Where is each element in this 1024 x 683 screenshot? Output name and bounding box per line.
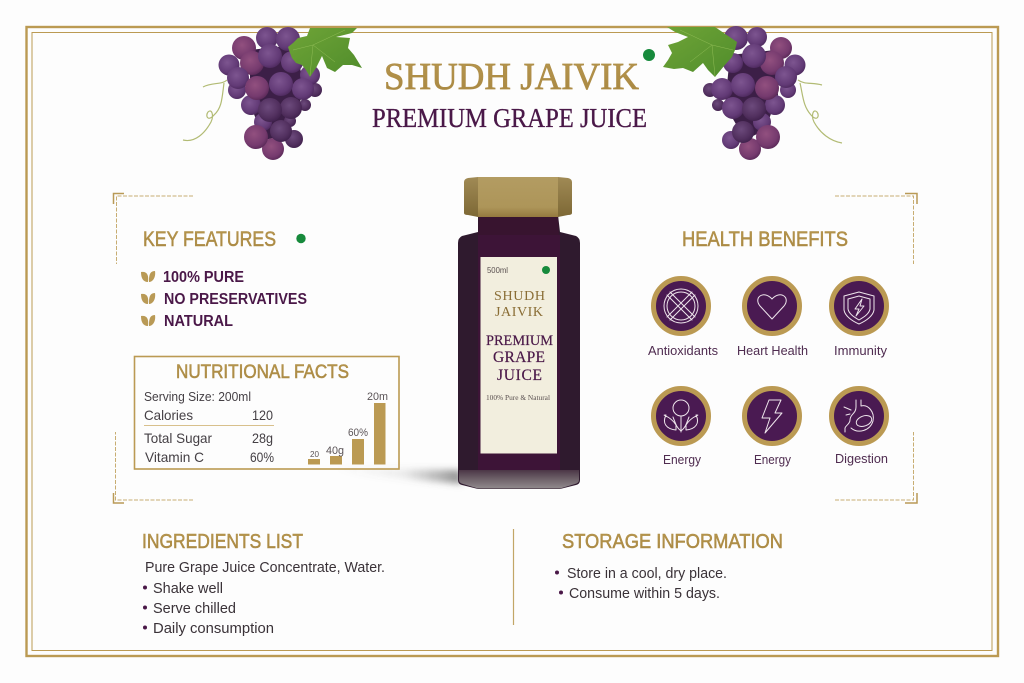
glass silhouette and side facets	[458, 215, 580, 489]
bottle cap	[464, 177, 572, 217]
corner brackets	[114, 194, 917, 503]
bar chart	[308, 391, 388, 464]
usage bullet list: Shake well	[153, 580, 223, 597]
bottle label: SHUDH	[494, 289, 545, 304]
bottle label: 500ml	[487, 265, 508, 275]
bottle label: JUICE	[497, 367, 542, 384]
feature: 100% pure: 100% PURE	[163, 269, 244, 286]
nutrition table: 120	[252, 407, 273, 423]
product subtitle: PREMIUM GRAPE JUICE	[372, 103, 647, 133]
tendril left	[183, 80, 227, 141]
green dot: title	[643, 49, 655, 61]
vine leaf left	[288, 28, 362, 77]
storage bullet list: Consume within 5 days.	[569, 585, 720, 602]
feature: no preservatives: NO PRESERVATIVES	[164, 291, 307, 308]
heading: health benefits: HEALTH BENEFITS	[682, 228, 848, 251]
juice centre panel	[478, 235, 560, 470]
heading: key features: KEY FEATURES	[143, 228, 276, 251]
juice bottle	[458, 177, 580, 489]
benefit: digestion	[832, 388, 888, 466]
benefit: immunity	[832, 278, 888, 358]
grapes right	[703, 26, 806, 160]
heading: nutritional facts: NUTRITIONAL FACTS	[176, 362, 349, 383]
vine leaf right	[663, 27, 737, 77]
benefit: energy bolt	[744, 388, 800, 467]
nutrition table: Calories	[144, 407, 193, 423]
grape cluster left	[183, 27, 362, 160]
benefit: antioxidants	[648, 278, 718, 358]
bar chart: 40g	[326, 445, 344, 457]
grapes left	[218, 27, 322, 160]
glass base	[459, 470, 579, 488]
usage bullet list: Serve chilled	[153, 600, 236, 617]
nutrition table: Total Sugar	[144, 430, 212, 446]
heading: storage information: STORAGE INFORMATION	[562, 531, 783, 553]
usage bullet list: Daily consumption	[153, 620, 274, 637]
storage bullet list	[555, 565, 727, 602]
neck	[478, 217, 559, 235]
panel: key features	[141, 228, 307, 330]
panel: nutritional facts	[134, 356, 399, 469]
title	[372, 56, 647, 133]
nutrition table: Vitamin C	[145, 449, 204, 465]
brand name: SHUDH JAIVIK	[384, 56, 640, 98]
usage bullet list	[143, 580, 274, 637]
panel: ingredients list	[142, 531, 385, 637]
bottle label: JAIVIK	[495, 305, 543, 320]
panel: storage information	[555, 531, 783, 602]
nutrition table	[144, 389, 274, 465]
nutrition table: 60%	[250, 449, 274, 465]
nutrition table: 28g	[252, 430, 273, 446]
benefit: antioxidants: Antioxidants	[648, 344, 718, 358]
bar chart: 20	[310, 450, 320, 459]
heading: ingredients list: INGREDIENTS LIST	[142, 531, 303, 553]
grape cluster right	[663, 26, 842, 160]
bottle label: PREMIUM	[486, 333, 553, 349]
bottle label: GRAPE	[493, 349, 545, 366]
benefit: digestion: Digestion	[835, 452, 888, 466]
panel: health benefits	[648, 228, 888, 467]
green dot: bottle label	[542, 266, 550, 274]
green dot: key features	[296, 234, 306, 243]
ingredients text: Pure Grape Juice Concentrate, Water.	[145, 559, 385, 576]
benefit: immunity: Immunity	[834, 344, 888, 358]
bottle shadow	[330, 468, 462, 484]
bottle body	[458, 215, 580, 489]
nutrition box outline	[134, 356, 399, 469]
bar chart: 60%	[348, 427, 368, 439]
bottle label: 100% Pure & Natural	[486, 393, 550, 402]
bottle label	[480, 257, 557, 454]
benefit: energy plant: Energy	[663, 452, 701, 467]
storage bullet list: Store in a cool, dry place.	[567, 565, 727, 582]
feature: natural: NATURAL	[164, 313, 233, 330]
benefit: heart health: Heart Health	[737, 344, 808, 358]
benefit: heart health	[737, 278, 808, 358]
nutrition table: Serving Size: 200ml	[144, 389, 251, 404]
benefit: energy bolt: Energy	[754, 452, 791, 467]
benefit: energy plant	[654, 388, 708, 467]
bar chart: 20m	[367, 391, 388, 403]
tendril right	[798, 80, 842, 143]
